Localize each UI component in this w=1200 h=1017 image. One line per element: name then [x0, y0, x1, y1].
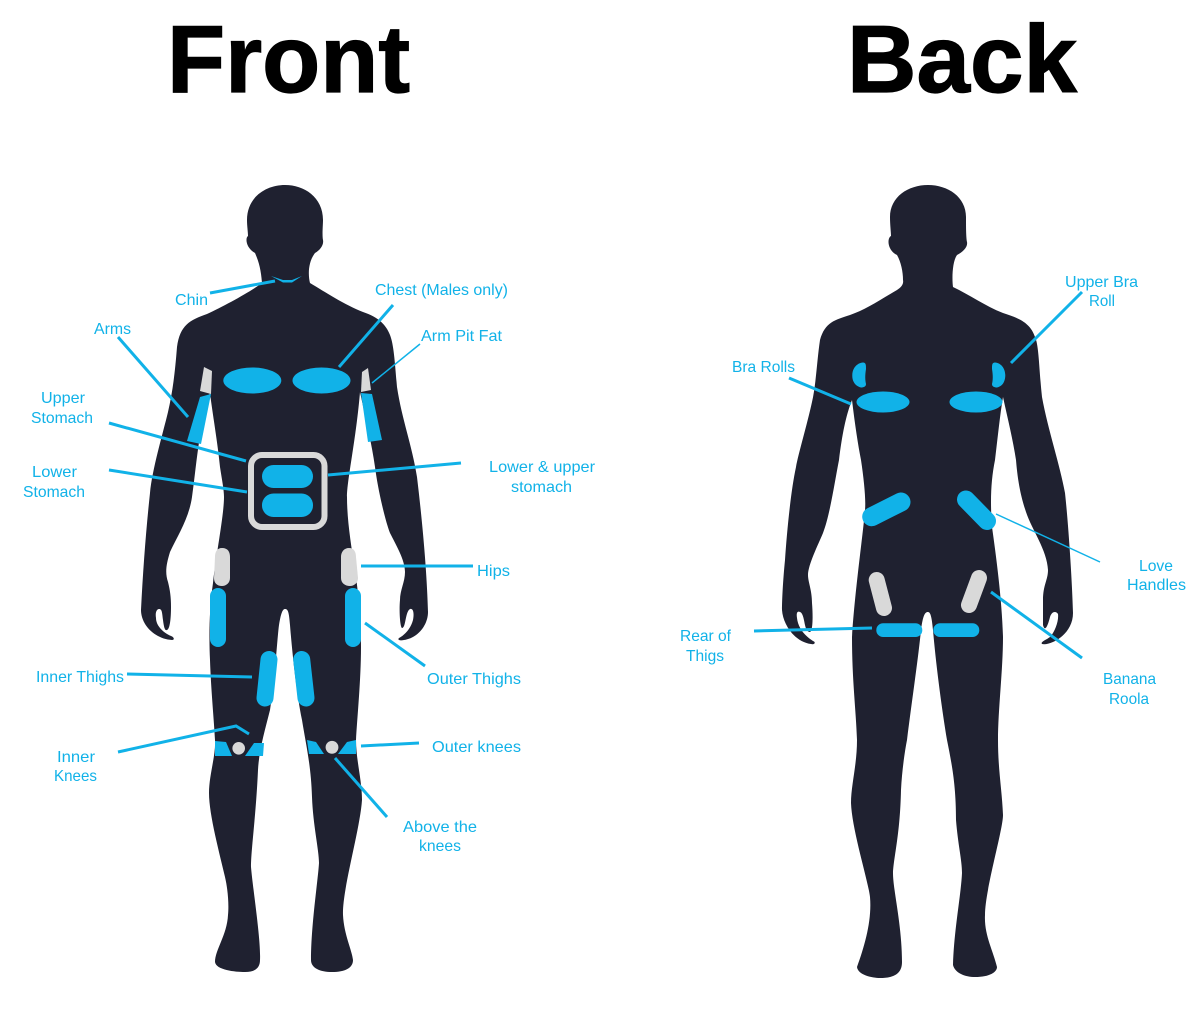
- label: Banana Roola: [1103, 671, 1156, 708]
- spots: upper bra roll: [852, 362, 1005, 388]
- label: Outer Thighs: Outer Thighs: [427, 671, 521, 688]
- label: Banana Roola: Roola: [1109, 691, 1149, 708]
- label: Upper Bra Roll: Roll: [1089, 293, 1115, 310]
- label: Outer knees: Outer knees: [432, 739, 521, 756]
- label: Lower & upper stomach: Lower & upper: [489, 459, 596, 476]
- spots: arm pit fat: [200, 367, 371, 394]
- label: Lower & upper stomach: stomach: [511, 479, 572, 496]
- label: Inner Knees: Inner: [57, 749, 96, 766]
- spot: chin: [271, 276, 302, 282]
- spots: stomach frame and pads: [251, 455, 324, 527]
- panel: front figure: [141, 185, 428, 972]
- label: Love Handles: Love: [1139, 558, 1173, 575]
- label: Lower Stomach: [23, 464, 85, 501]
- spots: love handles: [872, 500, 987, 521]
- spots: chest: [223, 368, 350, 394]
- spots: bra rolls: [856, 392, 1002, 412]
- panel: back figure: [782, 185, 1073, 978]
- label: Above the knees: Above the: [403, 819, 477, 836]
- label: Inner Knees: Knees: [54, 768, 97, 785]
- label: Lower & upper stomach: [489, 459, 596, 496]
- label: Arm Pit Fat: Arm Pit Fat: [421, 328, 503, 345]
- label: Chest (Males only): Chest (Males only): [375, 282, 508, 299]
- label: Arms: Arms: [94, 321, 131, 338]
- label: Love Handles: Handles: [1127, 577, 1186, 594]
- label: Love Handles: [1127, 558, 1186, 594]
- label: Upper Bra Roll: Upper Bra: [1065, 274, 1138, 291]
- label: Chin: Chin: [175, 292, 208, 309]
- label: Upper Stomach: Stomach: [31, 410, 93, 427]
- label: Lower Stomach: Lower: [32, 464, 78, 481]
- label: Upper Bra Roll: [1065, 274, 1138, 310]
- heading: Back: Back: [847, 6, 1078, 113]
- label: Rear of Thigs: [680, 628, 732, 665]
- label: Rear of Thigs: Thigs: [686, 648, 724, 665]
- label: Lower Stomach: Stomach: [23, 484, 85, 501]
- spots: arms: [187, 393, 382, 444]
- label: Rear of Thigs: Rear of: [680, 628, 732, 645]
- spots: outer thighs: [210, 588, 361, 647]
- labels: back: [680, 274, 1186, 708]
- spots: hips: [214, 548, 358, 586]
- label: Above the knees: [403, 819, 477, 855]
- heading: Front: Front: [167, 6, 410, 113]
- label: Bra Rolls: Bra Rolls: [732, 359, 795, 376]
- spots: banana roll: [877, 578, 979, 608]
- label: Inner Knees: [54, 749, 97, 785]
- label: Upper Stomach: [31, 390, 93, 427]
- spots: inner thighs: [265, 660, 306, 698]
- labels: front: [23, 282, 596, 855]
- leader lines: front: [109, 281, 473, 817]
- label: Banana Roola: Banana: [1103, 671, 1156, 688]
- label: Hips: Hips: [477, 563, 510, 580]
- spots: knees: [215, 740, 356, 756]
- label: Above the knees: knees: [419, 838, 461, 855]
- label: Inner Thighs: Inner Thighs: [36, 669, 124, 686]
- label: Upper Stomach: Upper: [41, 390, 86, 407]
- body silhouette: back: [782, 185, 1073, 978]
- spots: rear of thighs: [876, 623, 979, 637]
- body silhouette: front: [141, 185, 428, 972]
- leader lines: back: [754, 292, 1100, 658]
